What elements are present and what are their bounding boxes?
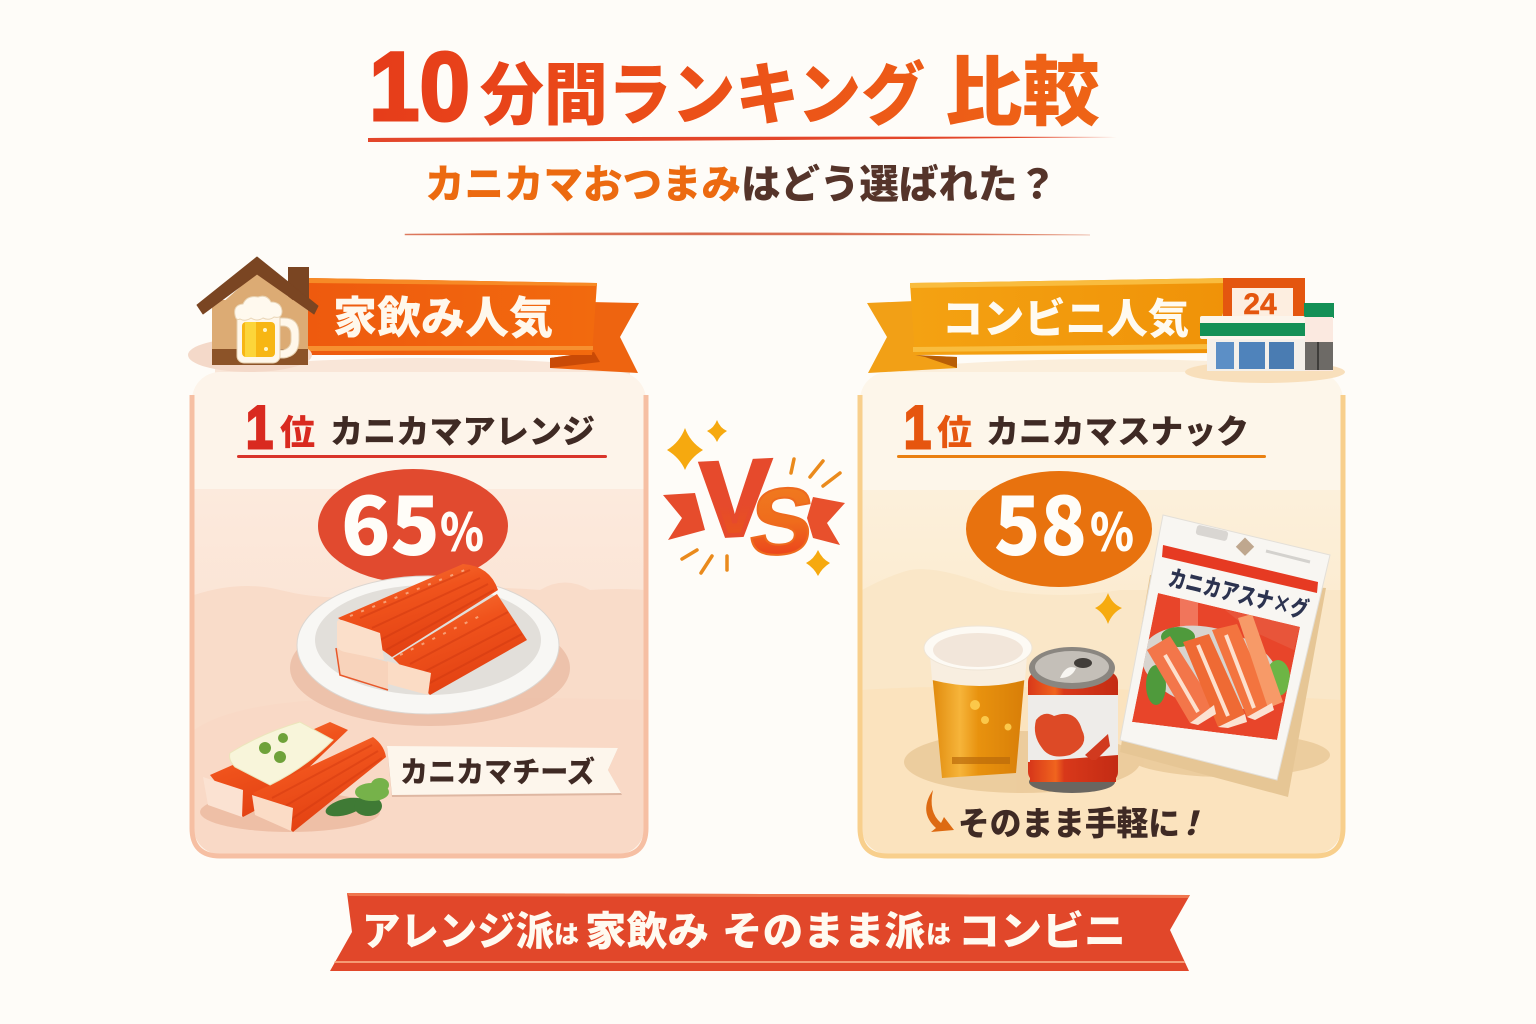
rank heading (897, 394, 1266, 461)
VS lettering: V (699, 438, 771, 560)
panel background (860, 359, 1343, 860)
ribbon: コンビニ人気: コンビニ人気 (942, 285, 1189, 345)
rank heading: 1 (246, 394, 273, 461)
banner text: そのまま派 (722, 899, 925, 957)
percent badge 58% (966, 463, 1152, 587)
panel: convenience store (860, 278, 1345, 860)
percent badge 58%: % (1090, 491, 1134, 566)
banner text (362, 899, 1126, 957)
lower right crab stick (387, 594, 527, 695)
caption: そのまま手軽に！ (926, 790, 1217, 845)
percent badge 58%: 58 (994, 463, 1087, 579)
title: 比較 (945, 31, 1100, 141)
percent badge 65%: 65 (341, 463, 440, 579)
banner text: は (554, 915, 579, 951)
sparkle (1095, 593, 1122, 624)
banner text: は (926, 915, 951, 951)
icon: house with beer mug (188, 257, 318, 372)
drink can (1028, 647, 1118, 793)
rank heading: 位 (280, 405, 315, 456)
panel: home drinking (188, 257, 646, 860)
ribbon: 家飲み人気: 家飲み人気 (333, 282, 553, 346)
VS lettering: S (745, 468, 819, 576)
subtitle: カニカマおつまみはどう選ばれた？ (425, 152, 1057, 210)
snack package (1120, 515, 1330, 797)
top crab stick (337, 564, 498, 660)
package name: カニカアスナ×グ (1165, 559, 1312, 625)
percent badge 65% (318, 463, 508, 583)
VS badge (663, 420, 845, 576)
package picture (1132, 590, 1300, 740)
arrow (926, 790, 954, 832)
wings (663, 493, 705, 540)
label: カニカマチーズ: カニカマチーズ (400, 749, 595, 791)
title: 10 (369, 32, 470, 141)
bottom banner (330, 893, 1190, 971)
caption: そのまま手軽に！: そのまま手軽に (958, 797, 1180, 845)
icon: convenience store: 24 (1243, 288, 1277, 321)
sparkles (667, 420, 830, 576)
plate with crab sticks (290, 564, 570, 726)
icon: convenience store (1185, 278, 1345, 383)
drink and snack shadow (904, 731, 1330, 793)
ribbon: 家飲み人気 (308, 278, 639, 373)
percent badge 65%: % (440, 491, 484, 566)
panel background (192, 358, 646, 860)
caption: そのまま手軽に！: ！ (1172, 797, 1217, 845)
burst lines (682, 459, 840, 573)
lower left crab stick (336, 648, 388, 690)
banner text: コンビニ (958, 899, 1126, 957)
beer mug (235, 296, 299, 363)
rank heading: カニカマスナック (986, 405, 1249, 453)
back stick (203, 722, 348, 817)
VS lettering (699, 438, 819, 576)
cheese crab sticks (200, 722, 389, 832)
banner text: アレンジ派 (362, 899, 554, 957)
front stick (252, 737, 386, 832)
rank heading: 位 (937, 405, 972, 456)
rank heading: カニカマアレンジ (330, 405, 595, 453)
ribbon: コンビニ人気 (867, 278, 1230, 373)
rank heading: 1 (904, 394, 931, 461)
title: 分間ランキング (480, 40, 925, 139)
beer cup (924, 626, 1032, 778)
banner text: 家飲み (585, 899, 709, 957)
cheese slice (230, 722, 333, 785)
title (368, 31, 1117, 142)
parsley (324, 778, 389, 820)
rank heading (237, 394, 607, 461)
